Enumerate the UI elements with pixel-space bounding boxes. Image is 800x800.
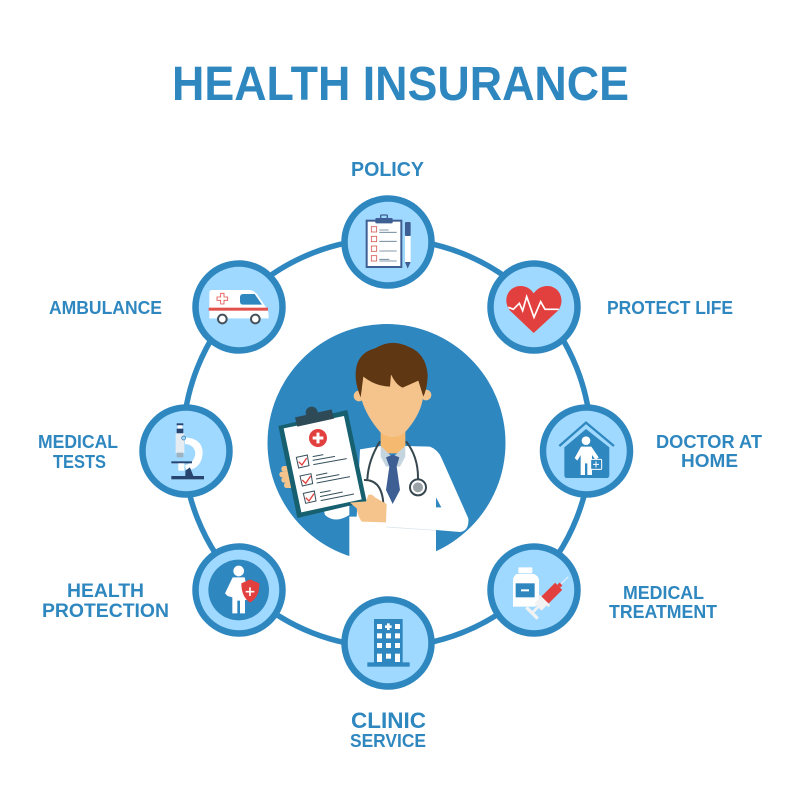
- node circle: [490, 264, 578, 350]
- doctor figure: [278, 343, 468, 580]
- label: CLINIC: [351, 708, 426, 733]
- panel: protect life node: [490, 264, 733, 350]
- red check marks: [299, 458, 314, 501]
- icon: person with shield: [208, 560, 269, 620]
- node circle: [344, 198, 432, 286]
- panel: doctor at home node: HOME: [681, 451, 738, 471]
- shirt collar: [381, 446, 405, 467]
- panel: health protection node: [42, 546, 282, 634]
- node circle: [142, 408, 230, 494]
- node circle: [344, 600, 432, 686]
- icon: hospital building: [367, 619, 410, 667]
- stethoscope tube: [367, 441, 418, 479]
- panel: clinic service node: [344, 600, 432, 751]
- panel: policy node: [344, 159, 432, 286]
- neck: [381, 427, 405, 453]
- node circle: [543, 408, 630, 494]
- panel: medical treatment node: [490, 546, 717, 634]
- node circle: [490, 546, 578, 634]
- panel: medical tests node: [38, 408, 230, 494]
- label: PROTECT LIFE: [607, 298, 733, 318]
- icon: microscope: [171, 423, 204, 479]
- checklist: [296, 455, 354, 503]
- coat sleeve notch: [436, 497, 441, 507]
- clipboard paper: [284, 416, 362, 512]
- stethoscope head: [410, 479, 426, 495]
- thumb and hand: [350, 495, 387, 522]
- coat cuff under clipboard: [323, 503, 349, 519]
- icon: ambulance: [209, 290, 269, 323]
- tie: [386, 455, 400, 504]
- label: MEDICAL: [623, 583, 704, 603]
- label: HEALTH: [67, 581, 144, 602]
- label: DOCTOR AT: [656, 432, 762, 452]
- icon: clipboard and pen: [367, 215, 411, 269]
- icon: medicine bottle and syringe: [513, 567, 574, 620]
- panel: medical treatment node: TREATMENT: [609, 602, 717, 622]
- connecting ring: [183, 239, 591, 647]
- hair: [356, 343, 428, 397]
- panel: medical tests node: TESTS: [53, 452, 106, 472]
- label: POLICY: [351, 159, 425, 181]
- panel: health protection node: PROTECTION: [42, 601, 169, 622]
- red cross badge: [309, 429, 327, 447]
- icon: house with doctor: [559, 423, 614, 478]
- coat hem shadow line: [387, 527, 436, 530]
- face: [362, 375, 423, 437]
- node circle: [196, 546, 282, 634]
- ears: [354, 391, 364, 401]
- clipboard clip: [295, 409, 334, 427]
- white coat: [349, 446, 468, 580]
- label: AMBULANCE: [49, 298, 162, 318]
- node circle: [196, 264, 282, 350]
- panel: clinic service node: SERVICE: [350, 731, 426, 751]
- fingers behind clipboard: [279, 466, 299, 488]
- panel: doctor at home node: [543, 408, 762, 494]
- panel: central doctor illustration: [268, 324, 506, 580]
- blue central disc: [268, 324, 506, 562]
- panel: ambulance node: [49, 264, 282, 350]
- label: MEDICAL: [38, 432, 118, 452]
- title: HEALTH INSURANCE: [172, 58, 629, 111]
- clipboard board: [278, 410, 367, 518]
- icon: heart with pulse: [506, 286, 561, 333]
